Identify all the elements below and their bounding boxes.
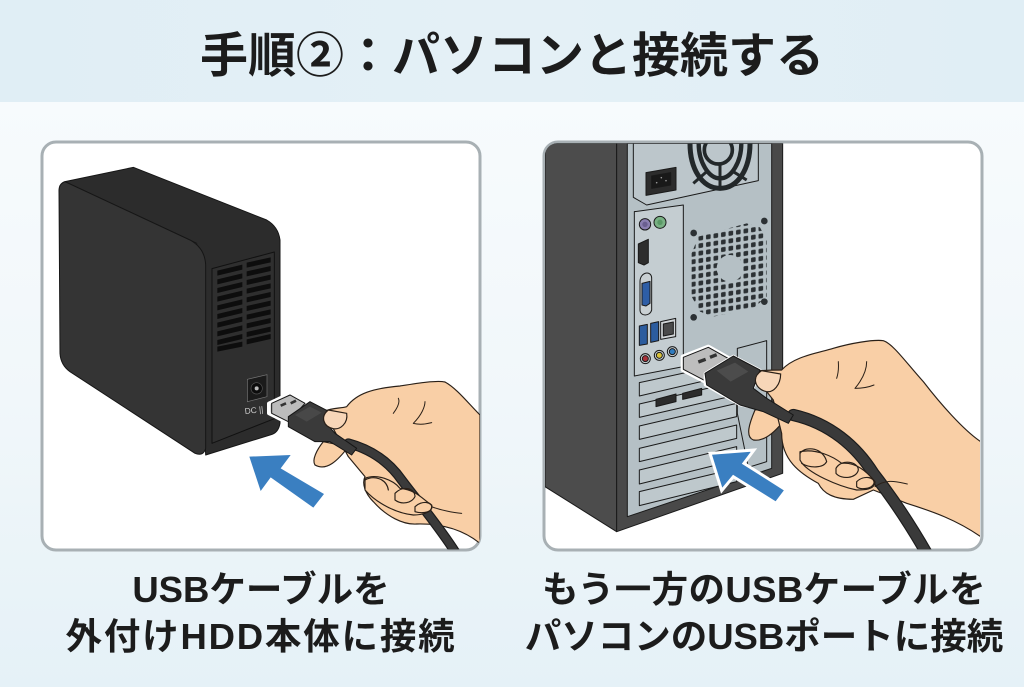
icon: DC power jack [247, 375, 267, 402]
icon: USB and LAN ports [639, 318, 676, 345]
caption: right panel: パソコンのUSBポートに接続 [525, 616, 1003, 657]
icon: PC tower rear [545, 136, 783, 532]
caption: left panel [66, 569, 456, 657]
header band [0, 0, 1024, 102]
icon: HDMI port [638, 239, 648, 265]
caption: right panel [525, 569, 1003, 657]
I/O plate [634, 205, 683, 376]
thumb [755, 371, 781, 392]
illustrations [40, 140, 984, 552]
icon: USB connector [269, 393, 357, 455]
DC label: DC || [244, 404, 264, 416]
icon: hand holding USB plug [749, 340, 981, 553]
USB strain relief [705, 356, 793, 423]
icon: external hard drive [59, 167, 280, 455]
USB connector top face [717, 363, 748, 382]
panel: external HDD [42, 142, 480, 552]
thumb [324, 410, 347, 429]
icon: PSU fan [690, 136, 750, 190]
icon: USB connector [683, 347, 760, 407]
arrow: plug direction [710, 450, 786, 503]
icon: audio jacks [640, 347, 677, 364]
icon: hand holding USB plug [314, 381, 480, 552]
icon: VGA port [640, 273, 652, 315]
icon: case vent grid [690, 218, 768, 321]
icon: power socket [646, 167, 676, 195]
expansion slots [639, 362, 737, 506]
icon: PS/2 ports [639, 216, 666, 230]
caption: right panel: もう一方のUSBケーブルを [542, 569, 986, 610]
caption: left panel: 外付けHDD本体に接続 [66, 616, 456, 657]
arrow: plug direction [249, 455, 324, 508]
title: 手順②：パソコンと接続する [200, 30, 824, 83]
caption: left panel: USBケーブルを [132, 569, 390, 610]
panel: PC tower [544, 136, 982, 553]
